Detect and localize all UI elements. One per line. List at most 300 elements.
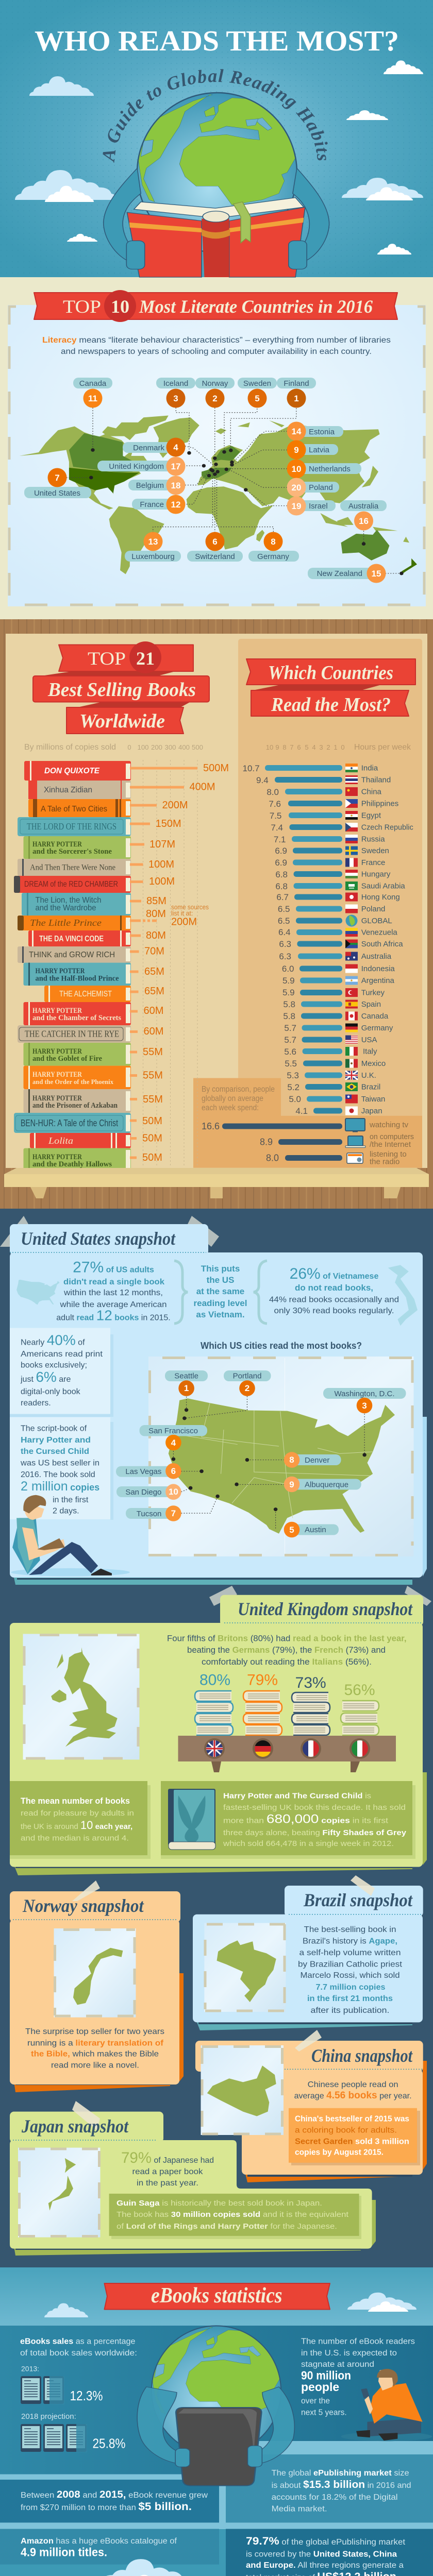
text: Brazil fact: in the first 21 months bbox=[307, 1994, 393, 2003]
country labels: Luxembourg bbox=[131, 552, 175, 561]
chart: copies sold bars: 100M bbox=[148, 859, 174, 870]
text: Vietnamese readers: 26% of Vietnamese bbox=[290, 1265, 378, 1282]
city badges: 6 bbox=[171, 1466, 176, 1476]
text: Amazon catalogue: 4.9 million titles. bbox=[21, 2545, 107, 2558]
chart: copies sold bars: list it at: bbox=[171, 910, 193, 917]
text: same reading level: This puts bbox=[201, 1264, 240, 1274]
text: comparison panel: the radio bbox=[370, 1158, 399, 1166]
text: Amazon catalogue bbox=[21, 2537, 177, 2558]
shelf bbox=[4, 1168, 429, 1198]
box: Harry Potter script book: 2 days. bbox=[53, 1506, 79, 1516]
book: Chamber of Secrets: and the Chamber of Secrets bbox=[32, 1014, 121, 1022]
chart: hours read per week bbox=[243, 764, 413, 1116]
text: US adults: adult read 12 books in 2015. bbox=[56, 1308, 171, 1323]
text: Norway fact: running is a literary translation of bbox=[27, 2039, 164, 2048]
text: ebook revenue bbox=[21, 2489, 208, 2513]
text: Norway fact: read more like a novel. bbox=[51, 2061, 139, 2070]
text: ebook sales share: 2018 projection: bbox=[21, 2412, 76, 2421]
box: Secret Garden: a coloring book for adults. bbox=[295, 2126, 397, 2135]
chart: copies sold bars: 65M bbox=[144, 966, 164, 977]
rank badges: 8 bbox=[271, 537, 276, 547]
chart: copies sold bars: 85M bbox=[146, 895, 166, 907]
text: comparison panel: each week spend: bbox=[202, 1104, 259, 1112]
text: market share: 79.7% of the global ePublishing market bbox=[246, 2535, 406, 2547]
text: Brazil fact: Brazil's history is Agape, bbox=[303, 1937, 397, 1945]
chart: hours read per week: Japan bbox=[361, 1107, 382, 1115]
box: Secret Garden: copies by August 2015. bbox=[295, 2148, 384, 2157]
book: Deathly Hallows: and the Deathly Hallows bbox=[32, 1160, 112, 1168]
banner: eBooks statistics bbox=[104, 2283, 330, 2309]
chart: hours read per week: Czech Republic bbox=[361, 823, 413, 832]
book: The Catcher in the Rye bbox=[18, 1025, 131, 1043]
rank badges: 1 bbox=[294, 394, 299, 403]
chart: hours read per week: 5.5 bbox=[285, 1059, 297, 1069]
heading: top 21 best selling books worldwide: TOP bbox=[88, 648, 126, 669]
rank badges: 20 bbox=[292, 483, 301, 493]
heading: which countries read the most: Which Countries bbox=[268, 662, 393, 684]
chart: hours read per week: 6.9 bbox=[275, 846, 287, 856]
rank badges: 7 bbox=[55, 473, 60, 483]
chart: hours read per week: 5.9 bbox=[282, 988, 295, 997]
panel: China snapshot bbox=[195, 2030, 427, 2182]
city labels: Portland bbox=[233, 1371, 261, 1381]
chart: hours read per week: 8.0 bbox=[267, 787, 279, 797]
chart: hours read per week: France bbox=[361, 858, 385, 867]
text: Brazil fact: 7.7 million copies bbox=[315, 1983, 386, 1992]
chart: copies sold bars: 50M bbox=[142, 1133, 162, 1144]
axis: hours per week: Hours per week bbox=[354, 743, 411, 752]
book: Half-Blood Prince: and the Half-Blood Prince bbox=[35, 975, 119, 983]
text: ebook sales share bbox=[20, 2337, 137, 2452]
rank badges: 9 bbox=[294, 445, 299, 455]
chart: hours read per week: Australia bbox=[361, 952, 392, 961]
box: Secret Garden bbox=[289, 2108, 420, 2165]
banner: top 10 most literate countries bbox=[34, 290, 397, 322]
text: same reading level bbox=[194, 1264, 247, 1319]
chart: hours read per week: Argentina bbox=[361, 976, 395, 985]
text: same reading level: the US bbox=[207, 1275, 234, 1285]
book: The Little Prince: The Little Prince bbox=[30, 918, 102, 928]
book: And Then There Were None: And Then There Were None bbox=[30, 863, 115, 872]
box: Harry Potter script book: 2016. The book sold bbox=[21, 1470, 95, 1479]
banner: top 10 most literate countries: Most Literate Countries in 2016 bbox=[139, 296, 373, 317]
text: US ebook readers: over the bbox=[301, 2397, 330, 2405]
panel: Japan snapshot bbox=[10, 2101, 376, 2256]
heading: which countries read the most bbox=[246, 659, 415, 716]
icon: globe reading a tablet bbox=[137, 2326, 294, 2486]
book: Harry Potter and the Sorcerer's Stone bbox=[24, 836, 131, 859]
country labels: United States bbox=[34, 489, 80, 498]
chart: hours read per week: 6.0 bbox=[282, 964, 294, 974]
text: four fifths of Britons bbox=[167, 1634, 407, 1667]
box: Harry Potter script book: 2 million copies bbox=[21, 1479, 99, 1494]
country labels: Sweden bbox=[243, 379, 271, 388]
text: comparison panel: /the Internet bbox=[370, 1140, 411, 1149]
chart: hours read per week: 10.7 bbox=[243, 764, 260, 773]
panel backdrops: ebook text boxes bbox=[0, 2326, 433, 2576]
chart: hours read per week: 6.8 bbox=[275, 870, 288, 879]
book: Order of the Phoenix: HARRY POTTER bbox=[32, 1071, 82, 1079]
chart: copies sold bars: 50M bbox=[142, 1152, 162, 1163]
text: four fifths of Britons: beating the Germans (79%), the French (73%) and bbox=[187, 1646, 386, 1655]
text: US adults: didn't read a single book bbox=[63, 1278, 164, 1286]
chart: hours read per week: 6.9 bbox=[275, 858, 287, 868]
heading: United Kingdom snapshot bbox=[238, 1599, 413, 1619]
book: Deathly Hallows bbox=[24, 1148, 131, 1172]
text: ebook sales share: 12.3% bbox=[70, 2388, 103, 2403]
city labels bbox=[116, 1370, 406, 1535]
text: Japanese readers: 79% of Japanese had bbox=[121, 2149, 214, 2166]
section background: literacy cream bbox=[0, 277, 433, 620]
panel: literacy world map bbox=[8, 305, 426, 606]
city badges: 9 bbox=[289, 1480, 294, 1489]
city badges: 2 bbox=[245, 1383, 249, 1393]
chart: hours read per week: USA bbox=[361, 1036, 377, 1044]
text: US adults: while the average American bbox=[59, 1300, 167, 1309]
box: Harry Potter script book bbox=[10, 1417, 113, 1520]
text: Japanese readers: read a paper book bbox=[132, 2167, 204, 2176]
box: mean number of books: The mean number of books bbox=[21, 1796, 130, 1806]
chart: hours read per week: 6.5 bbox=[278, 916, 290, 926]
box: mean number of books: and the median is around 4. bbox=[21, 1834, 129, 1842]
book: Xinhua Zidian: Xinhua Zidian bbox=[44, 786, 92, 794]
box: Harry Potter and the Cursed Child: which sold 664,478 in a single week in 2012. bbox=[223, 1839, 394, 1848]
heading: US cities: Which US cities read the most books? bbox=[201, 1341, 362, 1351]
text: US ebook readers: stagnate at around bbox=[301, 2360, 374, 2369]
text: US ebook readers: next 5 years. bbox=[301, 2408, 347, 2417]
box: Harry Potter and the Cursed Child: fastest-selling UK book this decade. It has sold bbox=[223, 1803, 406, 1812]
icon: seated reader bbox=[11, 1495, 130, 1577]
text: Brazil fact: a self-help volume written bbox=[299, 1948, 401, 1957]
country labels: Estonia bbox=[309, 428, 335, 436]
chart: hours read per week: Saudi Arabia bbox=[361, 882, 405, 890]
chart: copies sold bars: 60M bbox=[143, 1005, 163, 1016]
book: Goblet of Fire: HARRY POTTER bbox=[32, 1047, 82, 1056]
text: comparison panel: 16.6 bbox=[202, 1121, 220, 1131]
text: ebook sales share: of total book sales worldwide: bbox=[20, 2349, 137, 2358]
city labels: Denver bbox=[305, 1456, 329, 1465]
box: print vs digital readers: readers. bbox=[21, 1399, 51, 1408]
chart: hours read per week: 7.1 bbox=[274, 835, 286, 844]
chart: hours read per week: Spain bbox=[361, 1000, 381, 1009]
box: Harry Potter script book: Harry Potter and bbox=[21, 1436, 91, 1445]
box: Guin Saga: Guin Saga is historically the best sold book in Japan. bbox=[116, 2199, 322, 2208]
rank badges: 15 bbox=[372, 569, 381, 579]
axis: hours per week: 10 bbox=[266, 743, 273, 751]
box: mean number of books: the UK is around 10 each year, bbox=[21, 1819, 132, 1832]
text: ebook sales share: eBooks sales as a percentage bbox=[20, 2337, 135, 2346]
text: Brazil fact: by Brazilian Catholic priest bbox=[298, 1960, 403, 1969]
book: Lolita: Lolita bbox=[48, 1136, 73, 1146]
country labels: Iceland bbox=[163, 379, 188, 388]
book: Order of the Phoenix: and the Order of the Phoenix bbox=[32, 1078, 113, 1086]
country labels: Norway bbox=[202, 379, 228, 388]
city labels: Washington, D.C. bbox=[334, 1389, 395, 1398]
box: print vs digital readers bbox=[10, 1328, 113, 1417]
heading: top 21 best selling books worldwide: Best Selling Books bbox=[47, 679, 196, 701]
rank badges: 2 bbox=[212, 394, 218, 403]
box: Harry Potter script book: was US best seller in bbox=[20, 1459, 99, 1468]
chart: hours read per week: 6.3 bbox=[279, 952, 291, 961]
text: market share bbox=[246, 2535, 406, 2576]
chart: hours read per week: Thailand bbox=[361, 776, 391, 785]
panel: Brazil snapshot bbox=[193, 1875, 423, 2030]
text: Brazil fact: after its publication. bbox=[310, 2006, 390, 2015]
section background: ebooks bbox=[0, 2267, 433, 2576]
box: Guin Saga: of Lord of the Rings and Harry Potter for the Japanese. bbox=[116, 2222, 337, 2231]
chart: hours read per week: 6.4 bbox=[278, 927, 291, 937]
axis: hours per week: 7 bbox=[290, 743, 294, 751]
box: Harry Potter and the Cursed Child: more than 680,000 copies in its first bbox=[223, 1812, 389, 1826]
box: Secret Garden: China's bestseller of 2015 was bbox=[295, 2114, 409, 2124]
book: Don Quixote bbox=[24, 761, 131, 781]
rank badges: 6 bbox=[212, 537, 218, 547]
text: US ebook readers: The number of eBook readers bbox=[301, 2337, 415, 2346]
axis: hours per week: 1 bbox=[334, 743, 338, 751]
text: comparison panel: watching tv bbox=[369, 1121, 409, 1129]
text: Chinese reading average: Chinese people read on bbox=[308, 2080, 398, 2089]
chart: hours read per week: 9.4 bbox=[256, 775, 269, 785]
book: Harry Potter and the Sorcerer's Stone: and the Sorcerer's Stone bbox=[32, 848, 112, 856]
axis: copies sold bbox=[24, 743, 203, 1165]
chart: copies sold bars: 400M bbox=[190, 781, 215, 792]
text: same reading level: as Vietnam. bbox=[196, 1310, 245, 1319]
country labels: Germany bbox=[257, 552, 289, 561]
chart: hours read per week: Turkey bbox=[361, 988, 385, 997]
chart: hours read per week: Russia bbox=[361, 835, 385, 843]
icon: Cursed Child book bbox=[168, 1789, 215, 1850]
chart: copies sold bars: 100M bbox=[149, 876, 175, 887]
rank badges: 10 bbox=[292, 464, 301, 474]
chart: hours read per week: Italy bbox=[363, 1047, 377, 1056]
country labels: Switzerland bbox=[195, 552, 235, 561]
chart: copies sold bars: 150M bbox=[156, 818, 181, 829]
banner: top 10 most literate countries: TOP bbox=[63, 296, 101, 317]
axis: copies sold: 400 bbox=[178, 743, 190, 751]
section background: navy snapshots bbox=[0, 1209, 433, 2267]
chart: hours read per week: 7.5 bbox=[270, 811, 281, 821]
brackets bbox=[174, 1261, 267, 1324]
chart: hours read per week: 6.3 bbox=[279, 939, 291, 949]
chart: reading percentage book stacks: 73% bbox=[295, 1674, 326, 1691]
rank badges: 19 bbox=[292, 501, 301, 511]
country labels: Belgium bbox=[136, 481, 164, 490]
country labels: Israel bbox=[309, 502, 328, 511]
text: four fifths of Britons: comfortably out reading the Italians (56%). bbox=[202, 1657, 372, 1667]
chart: hours read per week: 5.7 bbox=[284, 1023, 296, 1033]
axis: hours per week: 9 bbox=[275, 743, 279, 751]
text: comparison panel: 8.9 bbox=[260, 1137, 273, 1147]
chart: hours read per week: Canada bbox=[361, 1012, 389, 1021]
heading: United States snapshot bbox=[21, 1228, 176, 1249]
book: Half-Blood Prince bbox=[24, 963, 131, 986]
chart: hours read per week: 4.1 bbox=[295, 1106, 308, 1116]
rank badges: 5 bbox=[255, 394, 260, 403]
map: Norway bbox=[54, 1928, 136, 2018]
box: print vs digital readers: books exclusively; bbox=[21, 1361, 87, 1370]
chart: hours read per week: 5.3 bbox=[287, 1071, 299, 1080]
icon: tv bbox=[345, 1118, 365, 1132]
rank badges: 4 bbox=[173, 443, 178, 452]
chart: reading percentage book stacks: 80% bbox=[199, 1672, 230, 1689]
box: mean number of books bbox=[10, 1781, 151, 1859]
heading: Norway snapshot bbox=[22, 1895, 144, 1916]
text: US adults: 27% of US adults bbox=[73, 1259, 154, 1276]
chart: hours read per week: 5.7 bbox=[284, 1035, 296, 1045]
rank badges: 11 bbox=[88, 394, 97, 403]
box: Harry Potter and the Cursed Child: three days alone, beating Fifty Shades of Grey bbox=[223, 1828, 407, 1837]
chart: hours read per week: Poland bbox=[361, 905, 385, 913]
chart: hours read per week: GLOBAL bbox=[361, 917, 392, 925]
chart: copies sold bars: 55M bbox=[143, 1046, 163, 1058]
chart: hours read per week: Indonesia bbox=[361, 964, 395, 973]
chart: copies sold bars: 80M bbox=[146, 930, 166, 941]
book: The Lion, the Witch and the Wardrobe bbox=[22, 893, 131, 916]
text: Vietnamese readers: only 30% read books regularly. bbox=[274, 1307, 394, 1315]
chart: copies sold bars: 65M bbox=[144, 986, 164, 997]
city labels: Tucson bbox=[137, 1510, 161, 1518]
chart: hours read per week: Brazil bbox=[361, 1083, 380, 1092]
panel: United States snapshot bbox=[0, 1216, 427, 1585]
subtitle on arc: A Guide to Global Reading Habits bbox=[103, 69, 328, 163]
country labels: Finland bbox=[284, 379, 309, 388]
rank badges: 13 bbox=[148, 537, 158, 547]
book: The Lion, the Witch and the Wardrobe: and the Wardrobe bbox=[35, 904, 96, 912]
box: Harry Potter script book: the Cursed Child bbox=[21, 1447, 89, 1456]
chart: hours read per week: Egypt bbox=[361, 811, 381, 820]
chart: hours read per week: 7.4 bbox=[271, 823, 283, 833]
text: same reading level: at the same bbox=[196, 1286, 244, 1296]
section background: hero sky bbox=[0, 0, 433, 277]
chart: hours read per week: 5.9 bbox=[282, 976, 295, 986]
chart: hours read per week: 6.7 bbox=[276, 892, 289, 902]
panel: Norway snapshot bbox=[10, 1880, 184, 2092]
box: Harry Potter script book: The script-book of bbox=[21, 1424, 87, 1433]
box: print vs digital readers: Nearly 40% of bbox=[21, 1332, 85, 1348]
section background: wood bookcase bbox=[0, 619, 433, 1209]
text: literacy definition: and newspapers to years of schooling and computer availability in each country. bbox=[61, 347, 372, 356]
chart: hours read per week: Taiwan bbox=[361, 1095, 385, 1104]
book: Ben-Hur bbox=[14, 1113, 131, 1133]
text: comparison panel: listening to bbox=[370, 1150, 407, 1159]
city badges: 1 bbox=[184, 1383, 189, 1393]
text: literacy definition bbox=[42, 336, 391, 356]
book: Goblet of Fire: and the Goblet of Fire bbox=[32, 1055, 102, 1063]
icon: tablets 2013 bbox=[21, 2376, 64, 2404]
chart: hours read per week: U.K. bbox=[361, 1071, 376, 1080]
chart: copies sold bars: 80M bbox=[146, 908, 166, 920]
chart: copies sold bars: 500M bbox=[203, 762, 229, 774]
book: The Lion, the Witch and the Wardrobe: The Lion, the Witch bbox=[35, 896, 101, 905]
chart: hours read per week: 5.2 bbox=[287, 1082, 299, 1092]
axis: hours per week: 2 bbox=[326, 743, 330, 751]
icon: radio bbox=[347, 1153, 363, 1163]
country labels: Poland bbox=[309, 483, 333, 492]
book: The Alchemist bbox=[44, 986, 131, 1002]
icon: tablets 2018 bbox=[21, 2424, 87, 2452]
text: comparison panel: By comparison, people bbox=[202, 1085, 275, 1094]
box: Secret Garden: Secret Garden sold 3 million bbox=[295, 2137, 409, 2146]
text: Japanese readers: in the past year. bbox=[137, 2179, 198, 2188]
chart: world map of literacy ranks bbox=[19, 408, 417, 575]
country labels: Canada bbox=[79, 379, 107, 388]
text: ePublishing market size: accounts for 18.2% of the Digital bbox=[272, 2493, 398, 2502]
heading: Japan snapshot bbox=[21, 2116, 129, 2137]
book: Prisoner of Azkaban: HARRY POTTER bbox=[32, 1094, 82, 1103]
book: Half-Blood Prince: HARRY POTTER bbox=[35, 967, 85, 975]
country labels: Denmark bbox=[133, 444, 164, 452]
chart: copies sold bars: some sources bbox=[171, 904, 209, 911]
box: Guin Saga: The book has 30 million copies sold and it is the equivalent bbox=[116, 2210, 349, 2219]
book: The Da Vinci Code: THE DA VINCI CODE bbox=[39, 935, 104, 943]
city labels: Las Vegas bbox=[125, 1467, 161, 1476]
text: Norway fact: The surprise top seller for two years bbox=[25, 2027, 164, 2036]
text: ePublishing market size: The global ePublishing market size bbox=[272, 2469, 409, 2478]
chart: copies sold bars bbox=[130, 762, 229, 1163]
chart: copies sold bars: 50M bbox=[142, 1115, 162, 1127]
axis: hours per week: 5 bbox=[305, 743, 309, 751]
chart: copies sold bars: 200M bbox=[171, 917, 197, 928]
rank badges: 12 bbox=[171, 500, 180, 510]
chart: hours read per week: 7.6 bbox=[269, 799, 281, 809]
country labels: Latvia bbox=[309, 446, 330, 454]
box: print vs digital readers: just 6% are bbox=[20, 1369, 71, 1385]
banner: eBooks statistics: eBooks statistics bbox=[151, 2284, 282, 2308]
axis: copies sold: 500 bbox=[192, 743, 203, 751]
text: comparison panel: globally on average bbox=[202, 1094, 263, 1103]
text: ebook revenue: Between 2008 and 2015, eBook revenue grew bbox=[21, 2489, 208, 2500]
chart: hours read per week: 5.6 bbox=[284, 1047, 296, 1057]
text: Vietnamese readers: do not read books, bbox=[295, 1283, 373, 1293]
country labels: Netherlands bbox=[309, 465, 351, 473]
chart: copies sold bars: 55M bbox=[143, 1094, 163, 1105]
axis: copies sold: 200 bbox=[151, 743, 162, 751]
chart: reading percentage book stacks bbox=[178, 1672, 396, 1772]
book: Lolita bbox=[30, 1133, 131, 1148]
rank badges: 16 bbox=[359, 516, 369, 526]
chart: hours read per week: 5.0 bbox=[289, 1094, 301, 1104]
box: print vs digital readers: digital-only book bbox=[21, 1387, 81, 1396]
panel: bookcase back bbox=[6, 634, 427, 1168]
flags bbox=[345, 764, 358, 1115]
city badges: 8 bbox=[289, 1455, 294, 1465]
book: A Tale of Two Cities: A Tale of Two Cities bbox=[41, 805, 107, 814]
book: Dream of the Red Chamber: DREAM of the RED CHAMBER bbox=[24, 880, 118, 889]
axis: copies sold: By millions of copies sold bbox=[24, 743, 116, 752]
city badges: 5 bbox=[289, 1525, 294, 1535]
chart: copies sold bars: 70M bbox=[144, 946, 164, 957]
text: same reading level: reading level bbox=[194, 1298, 247, 1308]
text: US ebook readers: in the U.S. is expected to bbox=[301, 2349, 397, 2358]
axis: hours per week: 8 bbox=[282, 743, 287, 751]
axis: copies sold: 100 bbox=[137, 743, 148, 751]
box: mean number of books: read for pleasure by adults in bbox=[21, 1809, 134, 1818]
heading: Brazil snapshot bbox=[303, 1890, 413, 1910]
text: literacy definition: Literacy means “literate behaviour characteristics” – everything from number of libraries bbox=[42, 336, 391, 345]
text: ebook sales share: 2013: bbox=[21, 2365, 39, 2373]
text: ePublishing market size bbox=[272, 2469, 411, 2514]
text: Brazil fact: Marcelo Rossi, which sold bbox=[300, 1971, 400, 1980]
chart: copies sold bars: 55M bbox=[143, 1070, 163, 1081]
text: Brazil fact bbox=[298, 1925, 403, 2015]
box: print vs digital readers: Americans read print bbox=[21, 1350, 103, 1359]
country labels: United Kingdom bbox=[109, 462, 164, 471]
rank badges: 3 bbox=[173, 394, 178, 403]
axis: hours per week: 0 bbox=[341, 743, 345, 751]
text: US adults: within the last 12 months, bbox=[63, 1289, 163, 1297]
country labels: Australia bbox=[348, 502, 379, 511]
text: Vietnamese readers bbox=[269, 1265, 399, 1315]
